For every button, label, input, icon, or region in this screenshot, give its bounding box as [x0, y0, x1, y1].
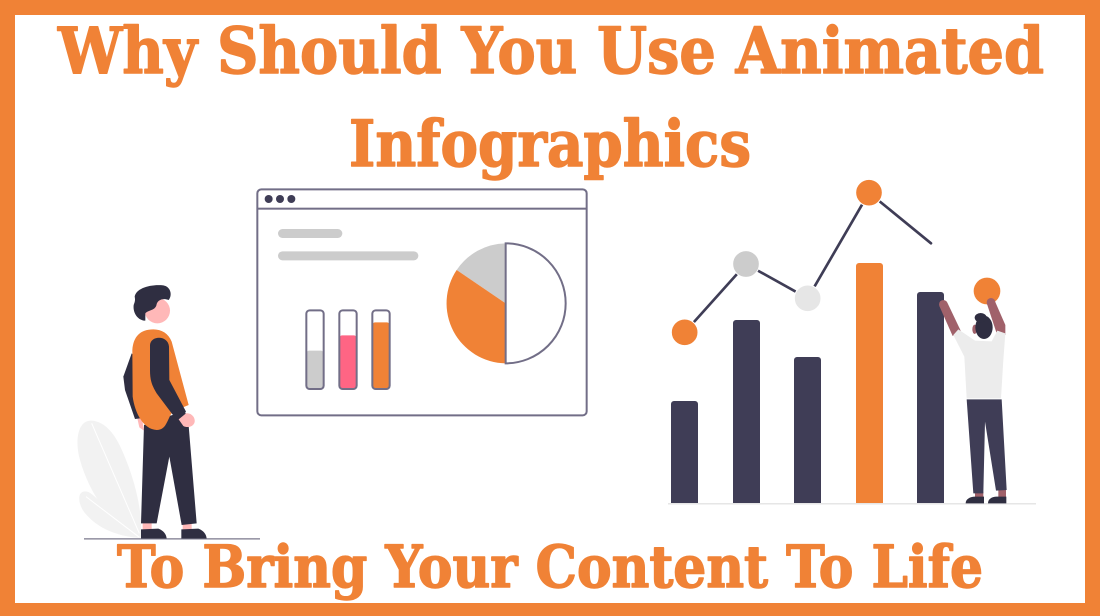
- subtitle: To Bring Your Content To Life: [117, 533, 983, 601]
- person figure: [939, 298, 1007, 503]
- title line 2: Infographics: [349, 107, 751, 182]
- line chart: [671, 179, 931, 346]
- window frame: [257, 189, 587, 415]
- orange data point: [974, 278, 1000, 304]
- pie chart: [447, 243, 566, 363]
- window title bar: [257, 195, 587, 210]
- mini bar gauges: [306, 310, 390, 389]
- placeholder text bars: [278, 229, 418, 260]
- ground line: [84, 538, 260, 540]
- illustration: person reaching for data point: [939, 278, 1007, 503]
- bar chart: [668, 263, 1036, 504]
- browser window panel: [257, 189, 587, 415]
- icon: plant leaves: [77, 421, 141, 538]
- illustration: standing person with plant: [77, 285, 260, 540]
- person figure: [123, 285, 207, 539]
